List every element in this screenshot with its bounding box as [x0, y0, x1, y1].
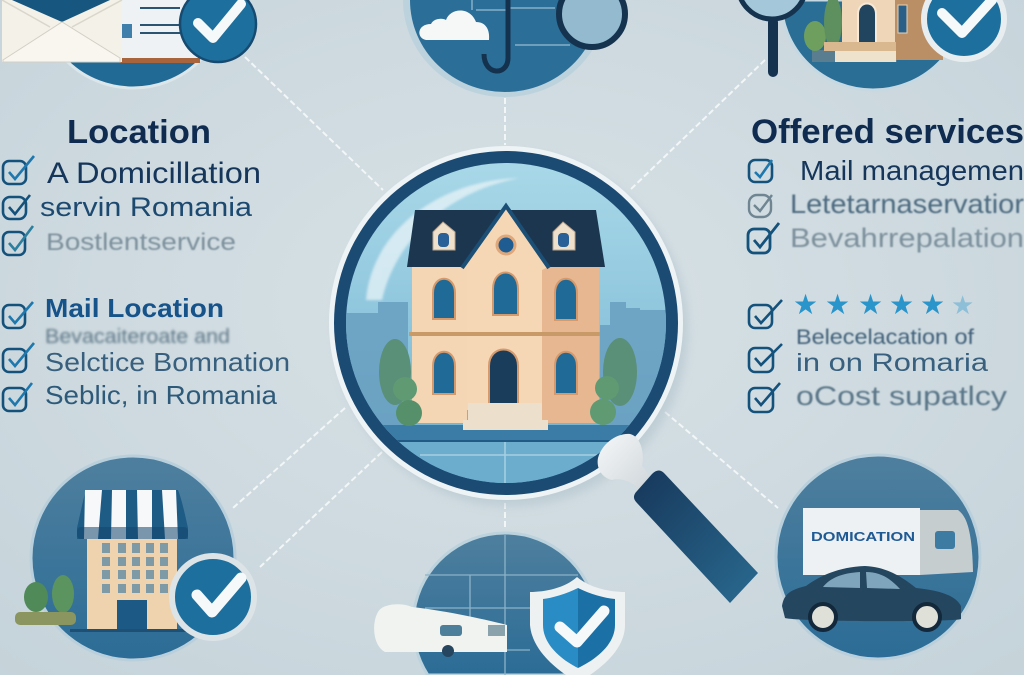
- text: row 2: in on Romaria: [796, 349, 988, 377]
- door: [489, 350, 518, 410]
- check: row 1: [3, 302, 33, 328]
- circle: bottom-left shop: [15, 456, 254, 660]
- bushes: [393, 377, 417, 401]
- circle: top-right building: [738, 0, 1004, 90]
- check: row 2: [3, 195, 30, 219]
- check: row 1: [749, 160, 772, 182]
- icon: shrubs: [15, 575, 76, 625]
- icon: shop building: [70, 490, 195, 632]
- check: row 2: [3, 343, 34, 372]
- check: row 1: [3, 156, 34, 184]
- icon: check badge: [172, 556, 254, 638]
- circle: top-center: [403, 0, 625, 97]
- panel: review list: [749, 288, 1008, 412]
- skyline: [345, 302, 672, 430]
- panel: mail location list: [3, 293, 290, 411]
- check: row 3: [3, 383, 32, 411]
- icon: faded star: ★: [951, 291, 974, 321]
- lens rim: [329, 146, 683, 500]
- panel: offered services list: [748, 113, 1024, 253]
- text: row 3: oCost supatlcy: [796, 381, 1008, 411]
- icon: van: [374, 604, 507, 657]
- circle: bottom-right delivery: [776, 455, 980, 659]
- check: row 2: [749, 344, 782, 372]
- house: [407, 205, 605, 430]
- upper windows: [433, 279, 455, 319]
- truck label: DOMICATION: [811, 529, 915, 544]
- check: row 1: [749, 300, 782, 328]
- grid lines: [425, 535, 578, 675]
- text: row 2: Letetarnaservatior: [790, 189, 1024, 219]
- steps: [463, 403, 548, 430]
- icon: cloud: [419, 10, 489, 40]
- lens shadow: [336, 154, 688, 506]
- icon: house: [804, 0, 943, 62]
- icon: hook: [484, 0, 508, 71]
- central magnifying glass: [329, 146, 758, 603]
- text: row 1: Mail managemen: [800, 155, 1024, 186]
- text: row 2: Selctice Bomnation: [45, 347, 290, 377]
- lower windows: [433, 352, 455, 394]
- icon: letter sheet: [120, 0, 200, 63]
- magnifier handle: [634, 470, 758, 603]
- circle: top-left mail: [2, 0, 256, 88]
- magnifier collar: [598, 434, 650, 490]
- heading: mail location: Mail Location: [45, 293, 224, 323]
- dashed connectors: [233, 57, 778, 567]
- check: row 3: [3, 226, 33, 255]
- grid lines: [472, 0, 570, 45]
- trees back: [379, 339, 411, 405]
- check: row 3: [748, 223, 779, 253]
- circle: bottom-center shield: [374, 533, 625, 675]
- text: row 3: Bostlentservice: [46, 229, 236, 256]
- heading: location: Location: [67, 113, 211, 150]
- heading: offered services: Offered services: [751, 113, 1024, 151]
- lens scene: [340, 178, 672, 495]
- icon: shield: [530, 577, 625, 675]
- text: row 1: A Domicillation: [47, 157, 261, 190]
- dormers: [433, 222, 455, 250]
- text: blurred line: Bevacaiteroate and: [45, 326, 230, 348]
- icon: magnifier: [738, 0, 806, 72]
- round window: [497, 236, 515, 254]
- icon: check badge: [924, 0, 1004, 59]
- icon: check badge: [180, 0, 256, 62]
- check: row 2: [749, 195, 772, 217]
- icon: rating stars: ★★★★★: [793, 288, 945, 321]
- ledge: [409, 332, 600, 336]
- icon: magnifier: [559, 0, 625, 47]
- highlight: [366, 178, 520, 300]
- text: row 3: Bevahrrepalation: [790, 223, 1024, 253]
- text: row 1: Belecelacation of: [796, 326, 974, 349]
- text: row 2: servin Romania: [40, 192, 253, 222]
- roof: [407, 210, 605, 267]
- panel: location list: [3, 113, 261, 256]
- text: row 3: Seblic, in Romania: [45, 380, 278, 410]
- icon: envelope: [2, 0, 122, 62]
- icon: car: [782, 566, 961, 630]
- icon: truck: [803, 508, 973, 575]
- ground: [382, 425, 630, 483]
- check: row 3: [749, 383, 780, 412]
